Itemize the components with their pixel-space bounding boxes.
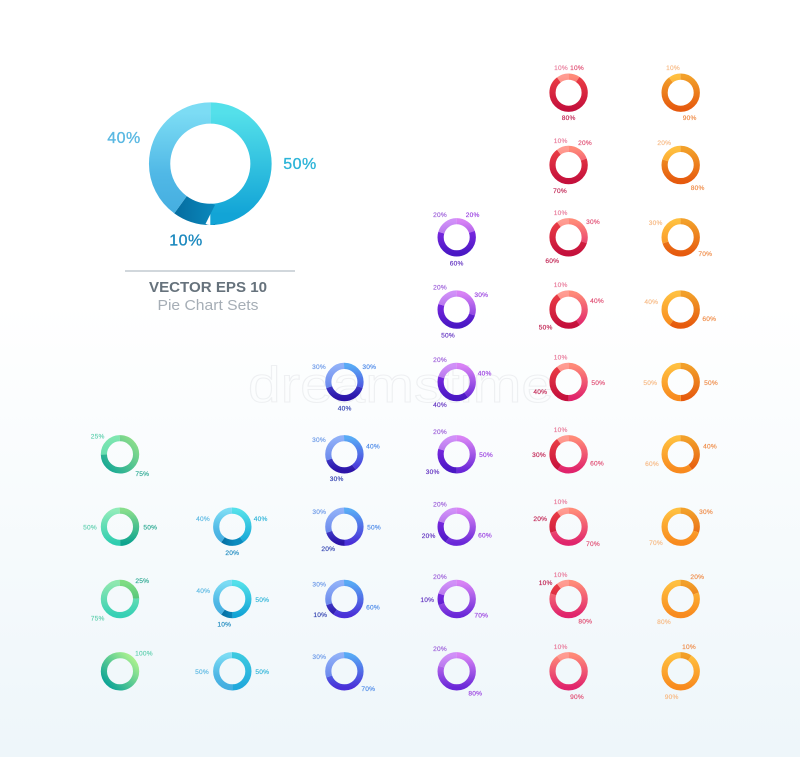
panel: indigo charts (312, 364, 381, 693)
chart: 40/20/40: 40% (196, 516, 210, 523)
chart: 50/30/20: 30% (426, 469, 440, 476)
chart: 70/30 (312, 654, 375, 693)
chart: 60/10/30: 30% (312, 582, 326, 588)
chart: 50/50: 50% (255, 669, 269, 676)
chart: 90/10 (552, 644, 585, 701)
chart: 30/50/20: 20% (433, 284, 447, 292)
chart: 40/30/30: 30% (330, 476, 344, 483)
panel: purple charts (420, 212, 493, 698)
chart: 40/50/10: 10% (554, 282, 568, 289)
chart: 80/20: 20% (433, 646, 447, 653)
chart: 50/10/40: 10% (217, 622, 231, 628)
chart: 40/30/30: 40% (366, 444, 380, 450)
chart: 20/70/10: 20% (578, 140, 592, 147)
chart: 70/20/10: 10% (554, 499, 568, 506)
chart: 25/75: 25% (91, 434, 105, 440)
chart: 10/90: 10% (682, 644, 696, 651)
chart: 50/50: 50% (704, 380, 718, 387)
chart: main donut 50/10/40 (107, 113, 317, 250)
chart: 25/75 variant (91, 578, 149, 622)
chart: 10/90 (665, 644, 697, 701)
main donut ring (160, 113, 261, 214)
chart: 25/75: 75% (135, 471, 149, 478)
chart: 10/80/10: 10% (570, 65, 584, 72)
chart: 20/70/10: 10% (554, 138, 568, 145)
chart: 60/30/10: 30% (532, 452, 546, 459)
chart: 30/60/10: 60% (545, 258, 559, 265)
chart: 20/60/20 (433, 212, 480, 268)
chart: 70/30: 70% (361, 686, 375, 693)
chart: 70/10/20: 20% (433, 574, 447, 581)
chart: 25/75 variant: 25% (135, 578, 149, 585)
chart: 50/40/10: 40% (533, 389, 547, 396)
chart: 90/10: 10% (666, 65, 680, 72)
chart: 70/30: 30% (649, 220, 663, 227)
chart: 60/40: 40% (644, 299, 658, 306)
chart: 70/10/20: 70% (474, 612, 488, 620)
chart: 10/90: 90% (665, 694, 679, 701)
chart: 80/20: 80% (468, 690, 482, 698)
chart: 30/50/20: 30% (474, 292, 488, 299)
chart: 20/60/20: 20% (466, 212, 480, 219)
chart: 90/10 (665, 65, 697, 122)
chart: 30/60/10: 10% (554, 210, 568, 217)
chart: 30/50/20 (433, 284, 488, 340)
chart: 30/40/30: 30% (362, 364, 376, 371)
chart: 40/60: 60% (645, 461, 659, 468)
chart: 50/50 (83, 511, 157, 543)
label: 50%: 50% (283, 156, 317, 173)
panel: green charts (83, 434, 157, 687)
chart: 100: 100% (135, 650, 153, 658)
chart: 20/70/10 (552, 138, 592, 195)
chart: 30/40/30: 40% (338, 406, 352, 412)
chart: 10/80/10 (552, 65, 585, 122)
chart: 30/60/10: 30% (586, 219, 600, 226)
chart: 40/60 (645, 438, 717, 470)
chart: 60/20/20: 60% (478, 532, 492, 540)
chart: 90/10: 10% (554, 644, 568, 651)
chart: 30/50/20: 50% (441, 332, 455, 340)
chart: 50/50: 50% (195, 669, 209, 676)
chart: 50/40/10: 10% (554, 354, 568, 362)
chart: 30/70: 70% (649, 540, 663, 547)
chart: 30/70 (649, 509, 713, 547)
chart: 40/40/20 (433, 357, 492, 409)
chart: 40/50/10: 40% (590, 298, 604, 305)
chart: 50/10/40: 40% (196, 588, 210, 595)
chart: 60/30/10: 10% (554, 427, 568, 434)
chart: 80/20: 20% (657, 140, 671, 147)
chart: 80/10/10: 80% (578, 618, 592, 626)
chart: 50/20/30 (312, 509, 381, 553)
chart: 60/10/30 (312, 582, 380, 619)
chart: 50/40/10: 50% (591, 380, 605, 387)
chart: 40/30/30 (312, 437, 380, 483)
chart: 10/80/10: 80% (562, 115, 576, 122)
chart: 50/20/30: 50% (367, 524, 381, 532)
chart: 40/20/40: 20% (225, 550, 239, 557)
chart: 60/30/10: 60% (590, 460, 604, 468)
chart: 60/40: 60% (702, 316, 716, 323)
chart: 40/20/40: 40% (254, 516, 268, 523)
chart: 10/80/10: 10% (554, 65, 568, 72)
chart: 50/10/40: 50% (255, 597, 269, 604)
chart: 80/10/10 (539, 572, 592, 626)
chart: 40/40/20: 20% (433, 357, 447, 364)
chart: 50/50: 50% (83, 524, 97, 532)
chart: 50/50 (643, 366, 718, 398)
chart: 40/40/20: 40% (433, 402, 447, 409)
title block (125, 271, 295, 314)
chart: 20/80: 20% (690, 574, 704, 581)
chart: 60/40 (644, 294, 716, 326)
chart: 70/30: 70% (698, 251, 712, 258)
chart: 50/30/20: 20% (433, 429, 447, 436)
chart: 60/10/30: 10% (313, 612, 327, 619)
chart: 20/70/10: 70% (553, 188, 567, 195)
chart: 50/10/40 (196, 583, 269, 628)
chart: 40/60: 40% (703, 444, 717, 450)
chart: 30/40/30 (312, 364, 376, 412)
chart: 80/20 (657, 140, 705, 192)
chart: 40/50/10 (539, 282, 604, 332)
chart: 100 (104, 650, 153, 687)
chart: 80/20 (433, 646, 482, 698)
chart: 50/30/20: 50% (479, 452, 493, 459)
chart: 60/30/10 (532, 427, 604, 470)
chart: 70/20/10 (533, 499, 600, 548)
chart: 60/20/20: 20% (422, 533, 436, 540)
label: 40%: 40% (107, 130, 141, 147)
subheading: Pie Chart Sets (158, 298, 258, 314)
chart: 50/50 (195, 655, 269, 687)
chart: 80/10/10: 10% (539, 580, 553, 587)
chart: 90/10: 90% (683, 115, 697, 122)
chart: 25/75 variant: 75% (91, 616, 105, 622)
chart: 70/20/10: 20% (533, 516, 547, 523)
chart: 40/20/40 (196, 511, 268, 557)
chart: 70/20/10: 70% (586, 541, 600, 548)
panel: red charts (532, 65, 605, 701)
chart: 90/10: 90% (570, 694, 584, 701)
chart: 50/20/30: 30% (312, 509, 326, 516)
chart: 50/50: 50% (643, 380, 657, 387)
chart: 70/10/20 (420, 574, 488, 620)
label: 10%: 10% (169, 232, 203, 250)
chart: 50/30/20 (426, 429, 493, 476)
heading: VECTOR EPS 10 (149, 280, 267, 296)
chart: 30/40/30: 30% (312, 364, 326, 371)
chart: 40/30/30: 30% (312, 437, 326, 444)
chart: 60/20/20 (422, 502, 492, 543)
chart: 70/30: 30% (312, 654, 326, 661)
chart: 70/10/20: 10% (420, 597, 434, 604)
chart: 60/20/20: 20% (433, 502, 447, 508)
chart: 40/50/10: 50% (539, 324, 553, 332)
panel: cyan charts (195, 511, 269, 687)
chart: 25/75 (91, 434, 149, 478)
chart: 20/80 (657, 574, 704, 626)
chart: 20/80: 80% (657, 619, 671, 626)
watermark: dreamstime (248, 357, 554, 413)
chart: 50/20/30: 20% (321, 546, 335, 553)
chart: 30/60/10 (545, 210, 600, 265)
chart: 70/30 (649, 220, 712, 258)
chart: 20/60/20: 60% (450, 260, 464, 268)
chart: 50/50: 50% (143, 524, 157, 532)
chart: 40/40/20: 40% (478, 370, 492, 378)
chart: 80/10/10: 10% (554, 572, 568, 579)
chart: 60/10/30: 60% (366, 604, 380, 612)
chart: 80/20: 80% (691, 185, 705, 192)
chart: 30/70: 30% (699, 509, 713, 516)
chart: 20/60/20: 20% (433, 212, 447, 219)
panel: orange charts (643, 65, 718, 701)
chart: 50/40/10 (533, 354, 605, 398)
